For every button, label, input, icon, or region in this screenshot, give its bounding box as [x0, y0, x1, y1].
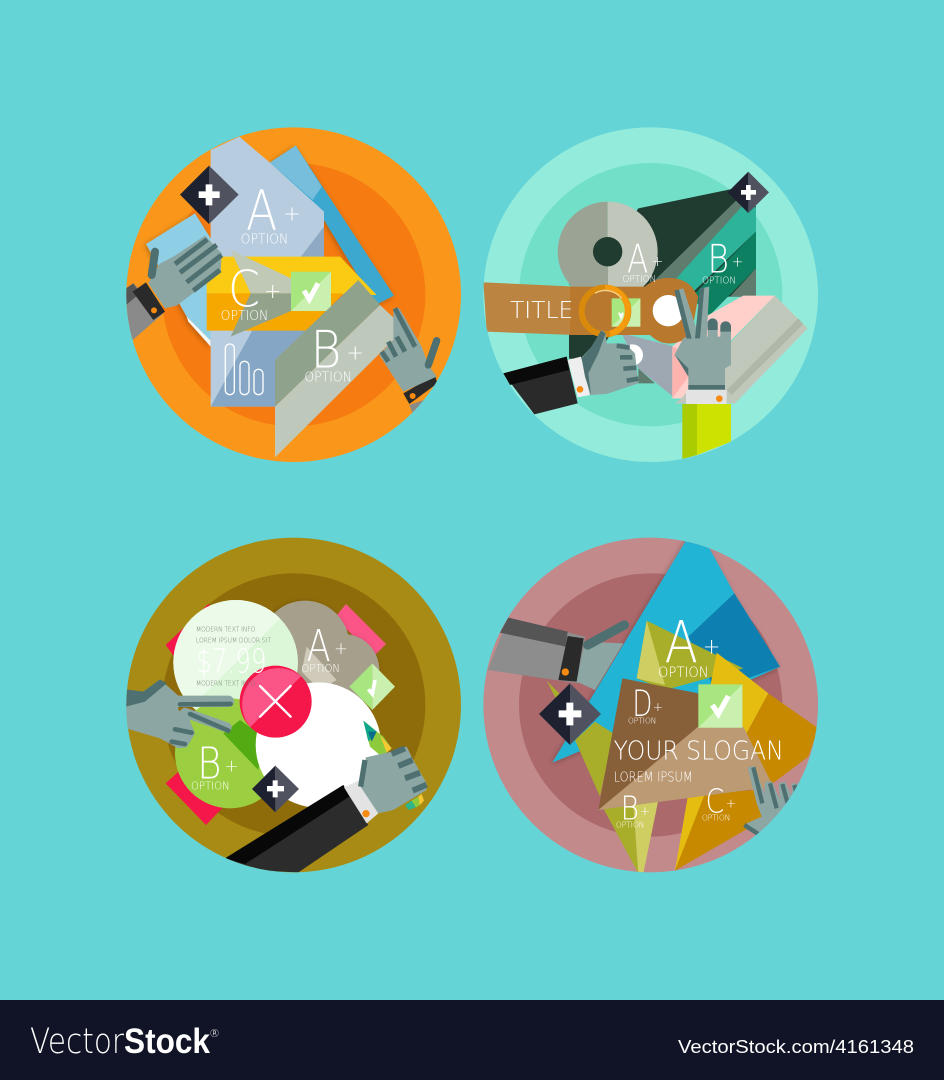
green circle B	[175, 698, 264, 808]
footer url: VectorStock.com/4161348	[678, 1037, 914, 1057]
text: C+ option: OPTION	[221, 309, 268, 324]
text: slogan: LOREM IPSUM	[614, 771, 693, 786]
text: A+ option: OPTION	[658, 665, 709, 681]
footer logo: ®	[209, 1027, 220, 1040]
tan circle A	[272, 600, 380, 702]
orange ring	[582, 288, 628, 334]
text: C+ option	[221, 261, 281, 324]
text: A+ option: OPTION	[241, 232, 288, 247]
hand: V sign with lime sleeve	[674, 287, 731, 459]
icon: plus diamond	[539, 683, 601, 745]
blue paper sheets	[146, 146, 394, 347]
text: C+ option	[702, 781, 736, 822]
icon: plus diamond	[728, 172, 769, 213]
text: D+ option: OPTION	[628, 716, 656, 726]
text: B+ option: +	[732, 255, 743, 271]
text: A+ option: +	[652, 254, 663, 270]
brown title band	[483, 278, 698, 344]
blue triangle	[552, 537, 780, 763]
yellow and orange C shape	[675, 790, 768, 871]
text: B+ option: +	[640, 803, 650, 818]
text: B+ option	[304, 321, 364, 386]
text: C+ option: C	[706, 781, 724, 820]
icon: check square	[612, 298, 640, 327]
text: A+ option: +	[703, 634, 721, 659]
pencil colored shape	[363, 721, 424, 810]
text: A+ option	[658, 608, 721, 681]
pale green circle	[173, 600, 298, 710]
panel: orange circle infographic	[126, 127, 461, 462]
footer bar	[0, 1000, 944, 1080]
text: D+ option: D	[632, 682, 652, 725]
olive triangle A	[637, 621, 743, 690]
text: price info	[196, 626, 272, 688]
hand: black sleeve hand	[225, 747, 427, 872]
icon: check diamond	[349, 663, 395, 710]
text: B+ option: OPTION	[304, 371, 352, 386]
text: slogan	[614, 737, 784, 786]
text: B+ option: OPTION	[616, 820, 644, 830]
text: A+ option	[241, 178, 301, 247]
text: A+ option: OPTION	[301, 662, 340, 675]
pink and gray sheet	[672, 296, 808, 403]
text: A+ option: +	[334, 639, 348, 658]
footer logo: Vector	[30, 1022, 125, 1062]
hand: pointing at lower right	[744, 766, 805, 835]
hand: pointing hand	[126, 679, 231, 748]
text: B+ option	[616, 789, 650, 830]
text: B+ option: B	[708, 236, 729, 282]
text: B+ option: B	[311, 321, 341, 381]
gray arrow	[231, 250, 293, 337]
text: A+ option: A	[627, 236, 648, 282]
text: B+ option: +	[347, 340, 364, 364]
icon: plus diamond	[180, 166, 239, 224]
text: A+ option: OPTION	[622, 274, 656, 285]
text: title: TITLE	[510, 296, 573, 324]
yellow and orange shape	[708, 653, 818, 787]
text: B+ option: OPTION	[191, 780, 230, 793]
text: C+ option: OPTION	[702, 812, 730, 822]
icon: plus diamond	[252, 766, 299, 812]
text: A+ option: A	[665, 608, 698, 676]
olive B triangle	[603, 800, 658, 873]
text: price info: MODERN TEXT INFO	[196, 680, 255, 688]
gray paper behind hands	[622, 335, 673, 396]
text: A+ option	[622, 236, 663, 285]
green stripes	[655, 200, 756, 317]
white circle	[256, 682, 381, 808]
hand: gray sleeve hand	[488, 618, 624, 690]
gray B ribbon	[275, 280, 405, 457]
text: C+ option: C	[228, 261, 260, 319]
small olive corner	[546, 680, 560, 698]
icon: close button	[240, 666, 312, 738]
panel: mint circle infographic	[483, 127, 818, 462]
lower pale blue panel	[211, 327, 310, 407]
panel: rose circle infographic	[483, 537, 818, 873]
brown slogan panel	[598, 678, 773, 810]
text: A+ option: A	[307, 622, 331, 672]
text: C+ option: +	[726, 796, 736, 811]
footer logo: Stock	[124, 1022, 210, 1061]
olive left triangle	[575, 722, 613, 797]
text: price info: MODERN TEXT INFO	[196, 626, 255, 634]
text: B+ option: B	[197, 739, 221, 789]
text: C+ option: +	[264, 279, 281, 303]
dark green backing shape	[569, 188, 756, 360]
pale blue option A panel	[211, 137, 324, 260]
text: price info: LOREM IPSUM DOLOR SIT	[196, 636, 272, 644]
text: B+ option	[702, 236, 743, 286]
gray disc	[558, 202, 658, 287]
text: B+ option: OPTION	[702, 275, 736, 286]
text: B+ option: B	[621, 789, 639, 828]
text: A+ option: +	[283, 202, 301, 226]
text: A+ option: A	[246, 178, 277, 242]
yellow C band	[207, 257, 377, 331]
footer logo	[30, 1022, 220, 1062]
text: slogan: YOUR SLOGAN	[614, 737, 784, 767]
icon: check square	[291, 272, 331, 311]
text: D+ option: +	[653, 699, 663, 714]
icon: bar chart outline	[225, 344, 263, 395]
text: A+ option	[301, 622, 348, 675]
text: price info: $7.99	[196, 643, 267, 681]
red and pink rectangles	[166, 604, 386, 825]
hand: left open hand	[126, 236, 222, 340]
panel: olive circle infographic	[126, 538, 461, 872]
icon: check square	[698, 684, 742, 728]
text: B+ option	[191, 739, 239, 793]
hand: thumbs up with black sleeve	[503, 330, 638, 414]
text: B+ option: +	[225, 757, 239, 776]
hand: right hand	[379, 308, 437, 415]
